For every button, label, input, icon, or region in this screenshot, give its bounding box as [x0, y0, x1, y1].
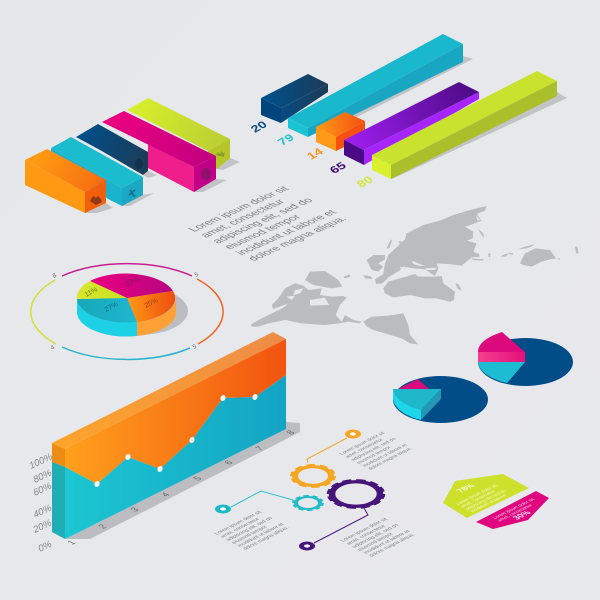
purple node	[299, 542, 315, 550]
x axis labels: 6	[222, 459, 235, 466]
bar shadows	[345, 56, 567, 179]
lime badge text: Lorem ipsum dolor sit	[454, 483, 500, 506]
y axis labels: 40%	[32, 502, 54, 521]
pie slices	[90, 274, 173, 298]
outer ring	[31, 264, 223, 359]
value labels	[248, 119, 376, 190]
x axis labels: 7	[253, 445, 266, 452]
orange gear text: Lorem ipsum dolor sit	[338, 431, 387, 456]
x axis labels	[65, 429, 297, 546]
teal gear text: Lorem ipsum dolor sit	[213, 510, 264, 536]
connector lines	[231, 438, 368, 543]
lime badge text: amet, consectetur	[459, 489, 498, 508]
paragraph text: adipiscing elit, sed do	[210, 197, 316, 245]
pie labels: 33%	[125, 276, 140, 289]
x axis labels: 5	[191, 475, 204, 482]
purple bar	[344, 82, 479, 165]
orange gear text: adipiscing elit, sed do	[350, 437, 398, 462]
y axis labels: 0%	[37, 539, 54, 555]
value labels: 20	[248, 119, 270, 135]
y axis labels: 20%	[31, 517, 54, 536]
pie chart with ring	[31, 264, 223, 359]
pie labels: 27%	[104, 301, 119, 314]
orange bar	[25, 149, 106, 213]
pink badge	[476, 491, 549, 529]
lime bar	[372, 71, 557, 179]
cyan bar	[288, 34, 463, 137]
inland seas	[400, 216, 481, 272]
Eurasia and Africa	[363, 206, 487, 302]
bar shadows	[85, 158, 240, 213]
value labels: 80	[354, 174, 376, 190]
lime badge text: incididunt ut labore	[469, 493, 509, 513]
teal gear text: dolore magna aliqua.	[242, 526, 291, 551]
ring labels: 5	[194, 272, 200, 279]
chart top face	[52, 332, 286, 449]
purple gear	[328, 480, 384, 508]
chart data points	[93, 393, 259, 488]
world map	[251, 206, 579, 344]
paragraph text: eiusmod tempor	[222, 213, 305, 251]
y axis labels	[28, 451, 55, 555]
Oceania	[470, 244, 579, 267]
pink badge text: Lorem ipsum dolor sit	[491, 497, 537, 520]
pie labels	[84, 276, 159, 314]
orange gear text: incididunt ut labore et	[361, 443, 410, 468]
ring labels: 4	[50, 345, 56, 352]
orange gear	[292, 465, 334, 487]
lime bar	[127, 98, 230, 169]
lime badge text: adipiscing elit, sed do	[464, 489, 509, 511]
lime badge	[443, 474, 529, 518]
y axis labels: 100%	[28, 451, 55, 472]
left 3D bars	[25, 98, 240, 213]
area chart	[28, 332, 300, 555]
percentage badges	[443, 474, 549, 529]
pie shadow	[90, 287, 188, 335]
purple gear text: incididunt ut labore et	[362, 529, 412, 555]
pie labels: 11%	[84, 286, 99, 299]
x axis labels: 8	[284, 429, 297, 436]
purple gear text: adipiscing elit, sed do	[351, 523, 401, 549]
value labels: 65	[327, 160, 349, 176]
orange node	[345, 430, 361, 438]
value labels: 14	[304, 146, 326, 162]
chart orange area	[65, 339, 286, 484]
pie labels: 25%	[144, 297, 159, 310]
Americas	[251, 271, 418, 344]
chart left side	[52, 443, 65, 467]
pink bar	[102, 111, 216, 192]
paragraph text: incididunt ut labore et	[234, 209, 340, 257]
purple gear text: Lorem ipsum dolor sit	[339, 517, 390, 543]
pie sides	[77, 299, 137, 337]
teal gear	[294, 496, 322, 510]
chart cyan area	[65, 375, 286, 539]
teal gear text: eiusmod tempor	[230, 525, 270, 545]
teal gear text: adipiscing elit, sed do	[225, 516, 275, 542]
gears diagram	[213, 430, 419, 558]
ring labels: 5	[192, 344, 198, 351]
teal gear text: incididunt ut labore et	[236, 522, 286, 548]
paragraph text: amet, consectetur	[198, 198, 288, 239]
paragraph text: dolore magna aliqua.	[246, 215, 350, 263]
y axis labels: 60%	[32, 480, 54, 499]
x axis labels: 4	[159, 491, 172, 498]
purple gear text: amet, consectetur	[345, 524, 388, 546]
paragraph text: Lorem ipsum dolor sit	[186, 185, 292, 233]
navy bar	[261, 74, 328, 123]
purple gear text: eiusmod tempor	[356, 532, 396, 552]
teal gear text: amet, consectetur	[219, 517, 262, 539]
ring labels	[50, 272, 200, 352]
chart shadow	[65, 422, 300, 539]
orange gear text: eiusmod tempor	[355, 446, 393, 465]
lime badge heading: 78%	[454, 482, 478, 494]
x axis labels: 3	[128, 506, 141, 513]
value labels: 79	[275, 132, 297, 148]
pink badge heading: 30%	[510, 509, 534, 521]
y axis labels: 80%	[32, 467, 54, 486]
orange bar	[316, 112, 365, 151]
orange gear text: dolore magna aliqua.	[367, 447, 414, 471]
x axis labels: 2	[96, 523, 109, 530]
exploded pie right	[478, 332, 573, 386]
Hudson Bay	[287, 288, 329, 306]
navy bar	[76, 124, 148, 175]
teal node	[215, 504, 231, 514]
purple gear text: dolore magna aliqua.	[368, 533, 417, 558]
right 3D bars	[248, 34, 567, 190]
cyan bar	[51, 137, 143, 206]
exploded pie left	[393, 376, 488, 423]
pink badge text: amet, consectetur	[496, 503, 535, 522]
ring labels: 8	[52, 273, 58, 280]
x axis labels: 1	[65, 539, 78, 546]
orange gear text: amet, consectetur	[344, 438, 385, 459]
